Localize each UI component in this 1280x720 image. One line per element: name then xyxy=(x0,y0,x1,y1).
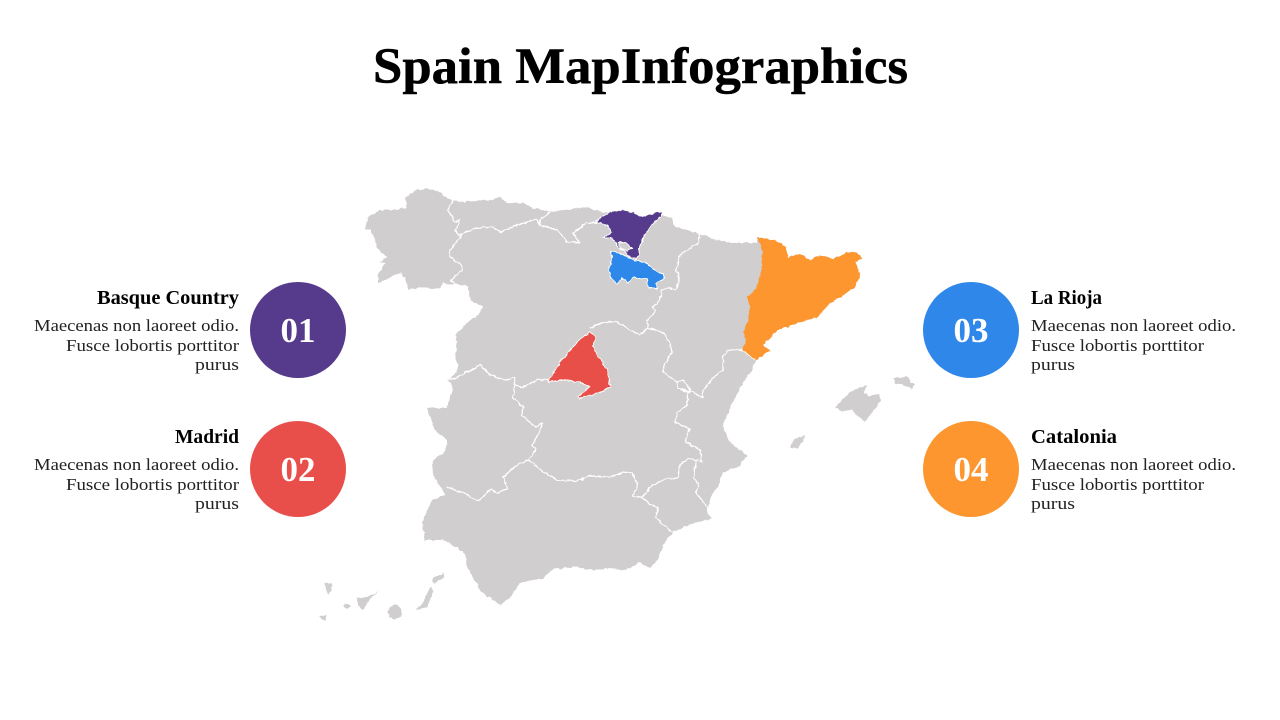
number circle 02: 02 xyxy=(280,450,316,489)
heading: Basque Country: Basque Country xyxy=(97,287,239,309)
region: Catalonia xyxy=(743,237,862,360)
map of Spain xyxy=(319,188,914,621)
number circle 04: 04 xyxy=(954,450,988,489)
region: La Rioja xyxy=(609,252,664,288)
description: Fusce lobortis porttitor xyxy=(66,336,239,355)
item 04: Catalonia xyxy=(923,421,1236,517)
description: Fusce lobortis porttitor xyxy=(1031,336,1204,355)
item 02: Madrid xyxy=(34,421,346,517)
heading: Catalonia: Catalonia xyxy=(1031,426,1117,448)
number circle 03 xyxy=(923,282,1019,378)
number circle 01: 01 xyxy=(280,311,316,350)
region: Madrid xyxy=(548,332,610,398)
description: purus xyxy=(195,355,239,374)
number circle 04 xyxy=(923,421,1019,517)
description: Maecenas non laoreet odio. xyxy=(34,455,239,474)
description xyxy=(1031,316,1236,374)
description xyxy=(34,316,239,374)
description xyxy=(1031,455,1236,513)
description: Fusce lobortis porttitor xyxy=(66,475,239,494)
description: purus xyxy=(1031,494,1075,513)
balearic islands xyxy=(790,377,914,449)
item 03: La Rioja xyxy=(923,282,1236,378)
item 01: Basque Country xyxy=(34,282,346,378)
description: purus xyxy=(1031,355,1075,374)
description: purus xyxy=(195,494,239,513)
region borders xyxy=(447,200,756,532)
mainland silhouette xyxy=(365,188,862,605)
region: Basque Country xyxy=(596,209,662,259)
heading: La Rioja: La Rioja xyxy=(1031,287,1102,309)
number circle 02 xyxy=(250,421,346,517)
description: Maecenas non laoreet odio. xyxy=(34,316,239,335)
heading: Madrid: Madrid xyxy=(175,426,239,448)
description: Maecenas non laoreet odio. xyxy=(1031,455,1236,474)
description xyxy=(34,455,239,513)
canary islands xyxy=(319,573,444,621)
number circle 01 xyxy=(250,282,346,378)
description: Maecenas non laoreet odio. xyxy=(1031,316,1236,335)
description: Fusce lobortis porttitor xyxy=(1031,475,1204,494)
number circle 03: 03 xyxy=(954,311,988,350)
title: Spain MapInfographics xyxy=(373,39,908,95)
